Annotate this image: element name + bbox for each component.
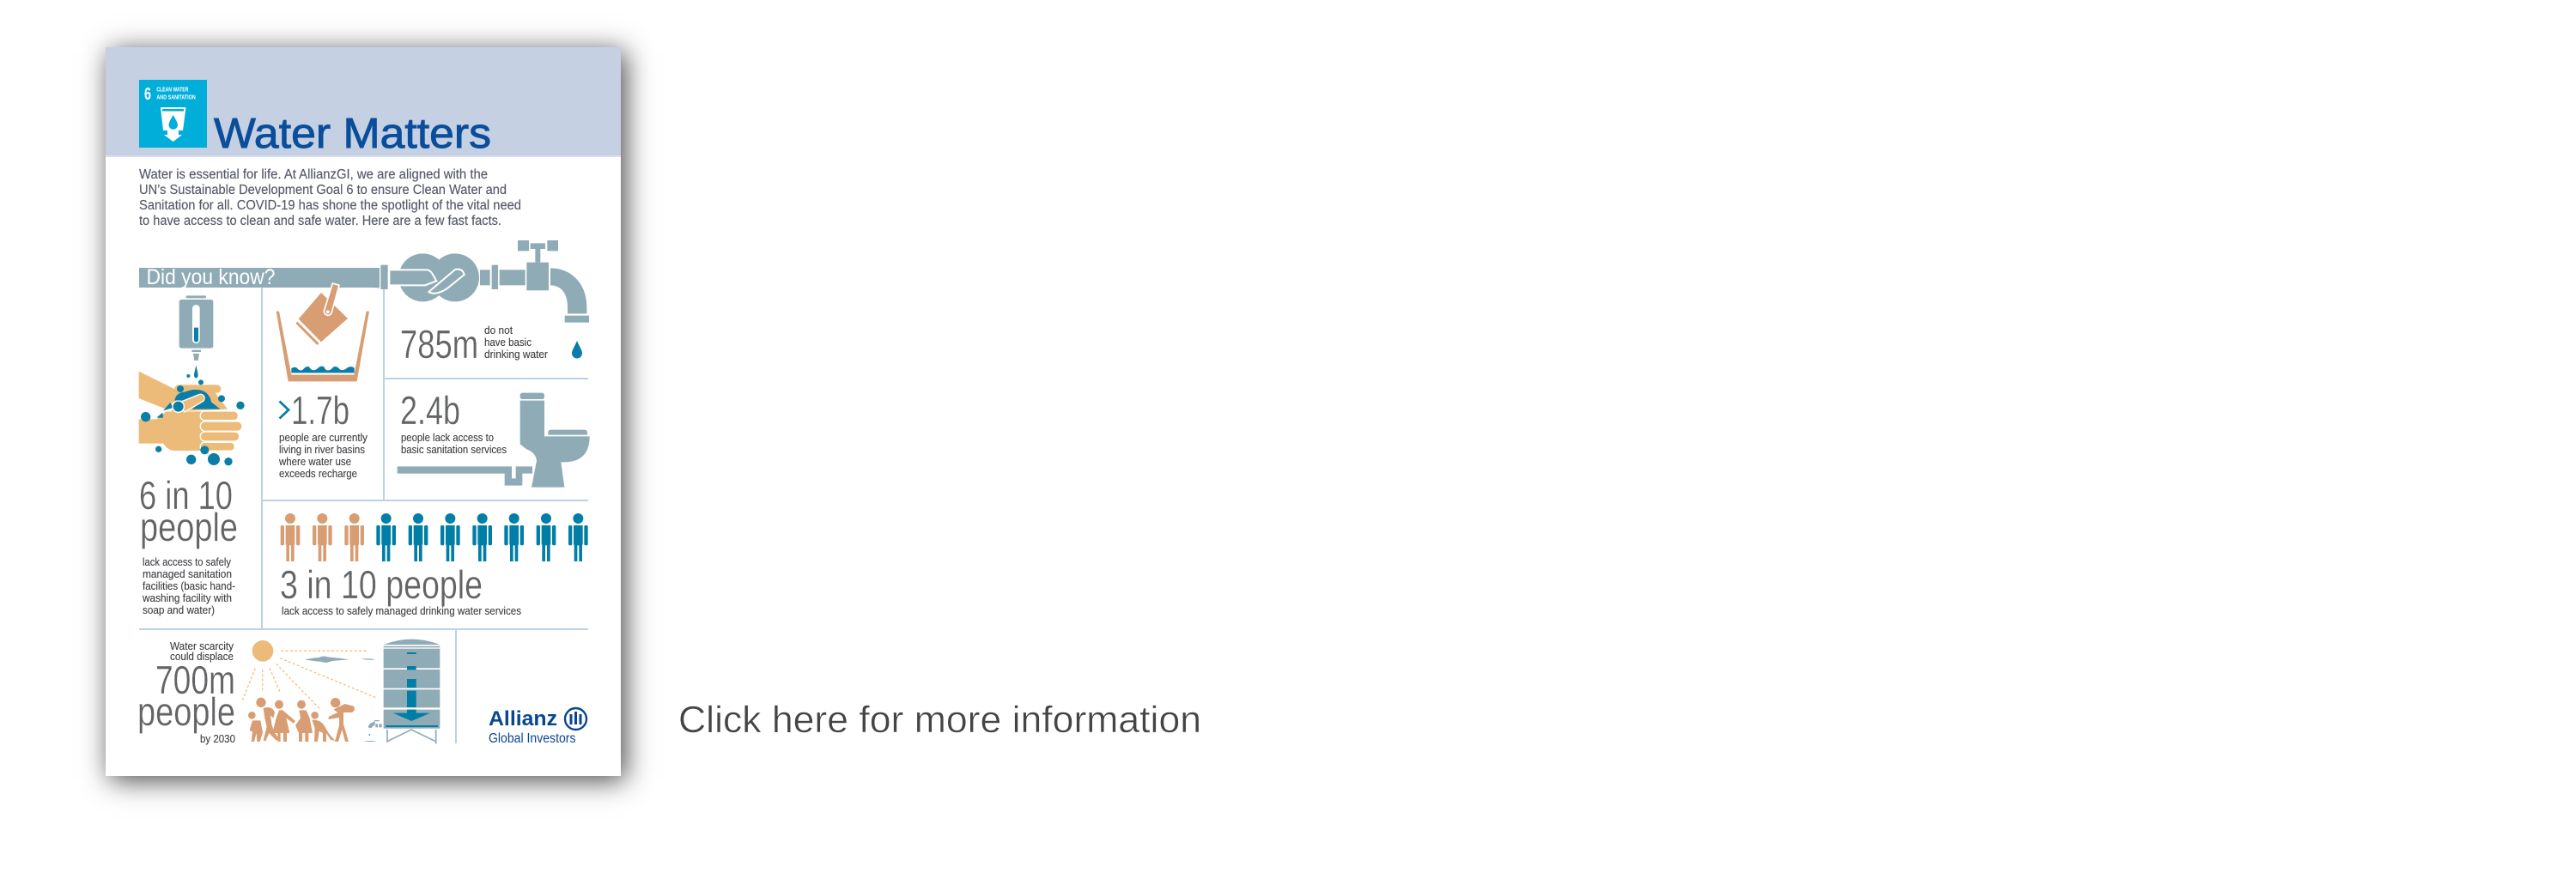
card background [106, 47, 621, 776]
icon: knotted pipe and tap [375, 240, 589, 323]
icon: sun and rays [242, 640, 376, 708]
link text: Click here for more information [678, 700, 1201, 741]
stat: 6 in 10 people [139, 473, 238, 616]
stat: 2.4b [400, 388, 507, 456]
intro text [139, 167, 521, 228]
logo: Allianz Global Investors: Allianz [489, 707, 557, 730]
icon: SDG 6 clean water and sanitation: CLEAN WATER [156, 86, 189, 94]
icon: soap dispenser [179, 295, 213, 378]
icon: bucket emptying into basin [276, 283, 369, 381]
stat: >1.7b: where water use [278, 455, 351, 468]
stat: >1.7b: living in river basins [279, 443, 365, 456]
pictogram: 3 of 10 people [281, 513, 588, 561]
icon: displaced people [248, 698, 355, 742]
dividers [139, 288, 588, 743]
icon: washing hands [139, 372, 245, 465]
icon: water tank [363, 640, 440, 744]
stat: 785m: 785m [400, 322, 478, 367]
stat: 785m: drinking water [484, 348, 549, 361]
icon: SDG 6 clean water and sanitation: AND SANITATION [156, 93, 196, 101]
stat: 2.4b: basic sanitation services [401, 443, 507, 456]
stat: 6 in 10 people: washing facility with [142, 591, 232, 604]
stat: 6 in 10 people: managed sanitation [143, 567, 232, 580]
stat: 3 in 10 people: 3 in 10 people [280, 562, 483, 607]
stat: 700m people: by 2030 [200, 732, 235, 745]
icon: toilet and pipe [398, 393, 590, 488]
logo: Allianz Global Investors: Global Investors [489, 731, 576, 746]
intro text: UN’s Sustainable Development Goal 6 to ensure Clean Water and [139, 183, 507, 197]
stat: 785m: do not [484, 324, 513, 336]
header band [106, 47, 621, 157]
stat: 2.4b: people lack access to [401, 431, 494, 444]
stat: >1.7b: 1.7b [291, 388, 349, 433]
stat: 6 in 10 people: people [140, 505, 238, 549]
heading bar: did you know [139, 265, 379, 289]
icon: SDG 6 clean water and sanitation [139, 80, 207, 148]
stat: 700m people: people [137, 689, 235, 734]
logo: Allianz Global Investors [489, 707, 586, 746]
icon: SDG 6 clean water and sanitation: 6 [144, 85, 151, 104]
heading bar: did you know: Did you know? [146, 265, 275, 289]
stat: 3 in 10 people: lack access to safely managed drinking water services [282, 604, 521, 617]
stat: 785m: have basic [484, 336, 532, 349]
stat: 700m people: could displace [170, 650, 234, 663]
intro text: Water is essential for life. At AllianzGI, we are aligned with the [139, 167, 488, 182]
intro text: to have access to clean and safe water. Here are a few fast facts. [139, 214, 501, 228]
icon: water drop [572, 341, 582, 359]
stat: 6 in 10 people: lack access to safely [143, 555, 232, 568]
icon: clouds [305, 656, 376, 663]
stat: >1.7b: people are currently [279, 431, 368, 444]
stat: 6 in 10 people: soap and water) [143, 603, 215, 616]
intro text: Sanitation for all. COVID-19 has shone the spotlight of the vital need [139, 198, 521, 213]
stat: 700m people [137, 640, 235, 745]
stat: 700m people: 700m [155, 658, 235, 702]
stat: >1.7b: exceeds recharge [279, 467, 357, 480]
stat: 785m [400, 322, 549, 367]
stat: 6 in 10 people: facilities (basic hand- [143, 579, 235, 592]
stat: 2.4b: 2.4b [400, 388, 460, 433]
title: Water Matters [214, 111, 491, 157]
stat: 6 in 10 people: 6 in 10 [139, 473, 233, 518]
stat: >1.7b [278, 388, 368, 480]
stat: 700m people: Water scarcity [170, 640, 234, 652]
